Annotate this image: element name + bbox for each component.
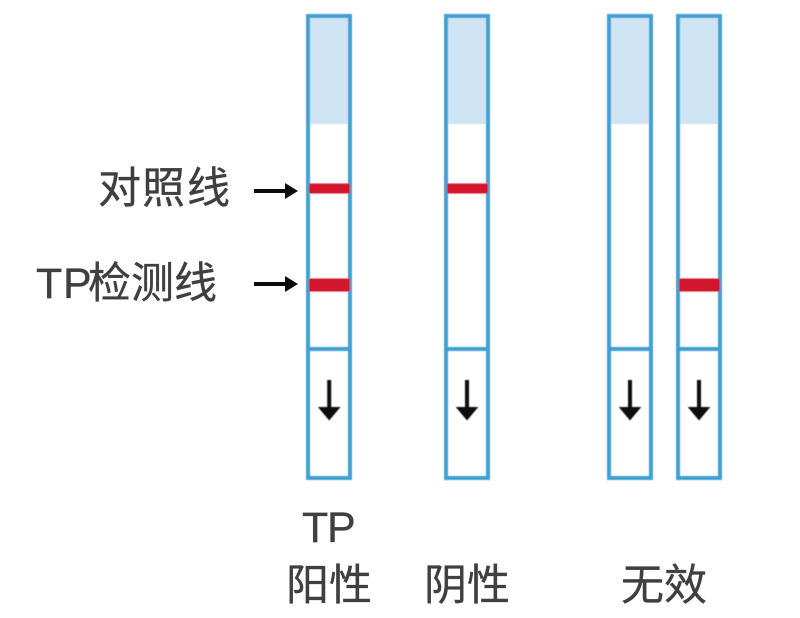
- label: positive: 阳性: [286, 562, 372, 610]
- label: negative: 阴性: [424, 562, 510, 610]
- strip: invalid, no lines: [609, 16, 651, 478]
- label: TP test line: TP检测线: [36, 260, 217, 308]
- label: TP positive: TP: [302, 504, 356, 552]
- strip: invalid, test line only: [678, 16, 720, 478]
- arrow: control line: [254, 183, 298, 199]
- label: control line: 对照线: [98, 165, 230, 213]
- label: invalid: 无效: [621, 562, 707, 610]
- strip: TP positive: [308, 16, 350, 478]
- arrow: TP test line: [254, 276, 298, 292]
- strip: negative: [446, 16, 488, 478]
